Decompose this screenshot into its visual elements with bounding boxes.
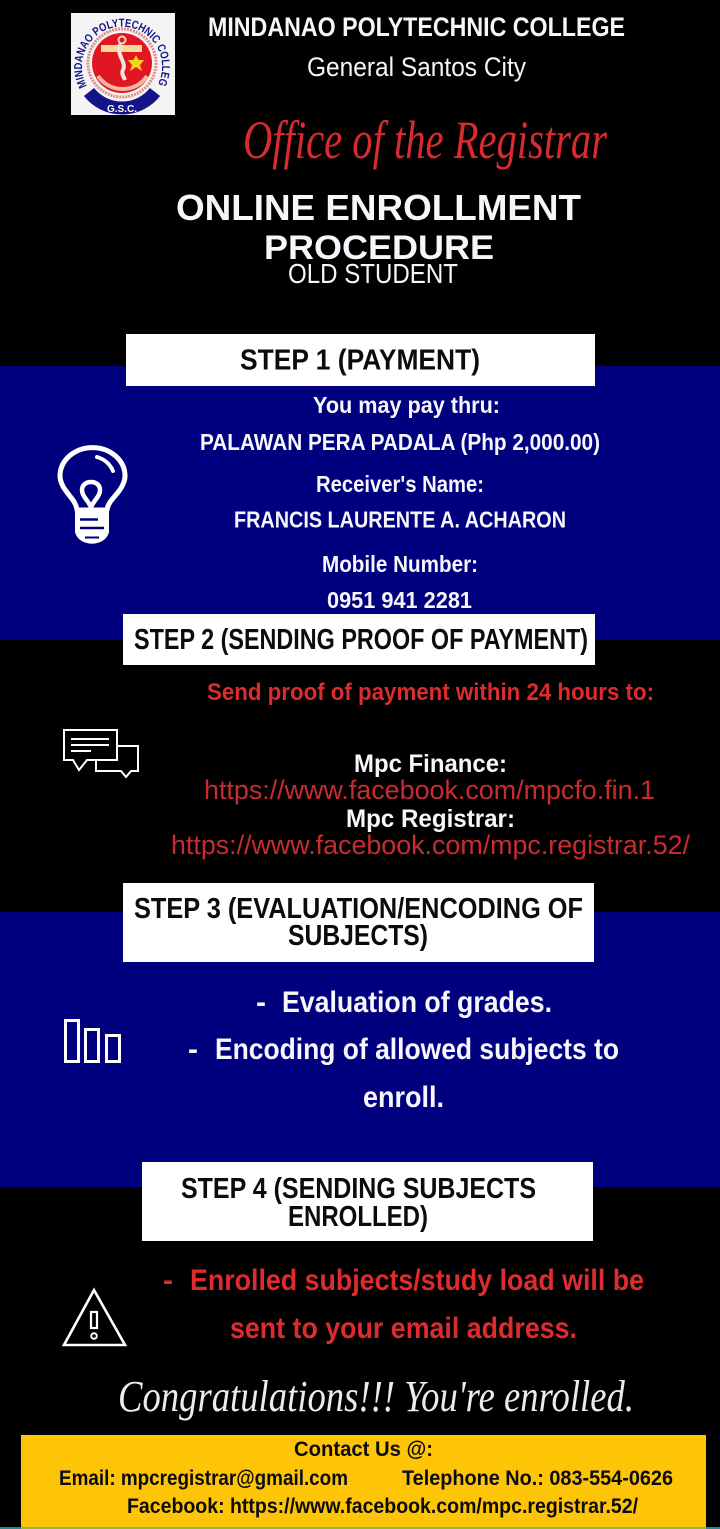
- text block: facebook contacts: [171, 750, 690, 860]
- subtitle: old student: OLD STUDENT: [288, 258, 458, 289]
- text block: facebook contacts: https://www.facebook.com/mpcfo.fin.1: [204, 775, 655, 805]
- step 4 header: STEP 4 (SENDING SUBJECTS: [181, 1173, 536, 1205]
- subtitle: city: General Santos City: [307, 52, 526, 82]
- text block: payment details: 0951 941 2281: [327, 587, 472, 613]
- text block: payment details: FRANCIS LAURENTE A. ACHARON: [234, 506, 566, 532]
- icon: light bulb: [60, 448, 125, 542]
- text block: evaluation list: -: [188, 1033, 198, 1066]
- panel: step 3 blue band: [0, 912, 720, 1187]
- text block: evaluation list: -: [256, 986, 266, 1019]
- panel: contact details: Email: mpcregistrar@gmail.com: [59, 1467, 348, 1490]
- heading: office of the registrar: Office of the Registrar: [243, 110, 608, 170]
- step 2 header: STEP 2 (SENDING PROOF OF PAYMENT): [134, 624, 588, 656]
- title: online enrollment: ONLINE ENROLLMENT: [176, 187, 581, 228]
- step 1 header: STEP 1 (PAYMENT): [240, 344, 480, 376]
- text block: evaluation list: [188, 986, 619, 1114]
- text block: payment details: [200, 392, 600, 613]
- text block: evaluation list: Evaluation of grades.: [282, 986, 552, 1019]
- step 4 header: [142, 1162, 593, 1241]
- icon: bar chart: [66, 1020, 120, 1062]
- text block: send proof instruction: Send proof of payment within 24 hours to:: [207, 679, 654, 706]
- text block: facebook contacts: Mpc Registrar:: [346, 805, 515, 833]
- text block: payment details: Mobile Number:: [322, 551, 478, 577]
- step 2 header: [123, 614, 595, 665]
- panel: step 1 blue band: [0, 366, 720, 640]
- panel: contact details: [0, 1435, 720, 1529]
- icon: warning triangle: [64, 1290, 125, 1345]
- step 4 header: ENROLLED): [288, 1201, 428, 1233]
- closing message: Congratulations!!! You're enrolled.: [118, 1372, 634, 1421]
- text block: enrolled subjects notice: sent to your email address.: [230, 1312, 577, 1345]
- text block: enrolled subjects notice: Enrolled subjects/study load will be: [190, 1264, 644, 1297]
- text block: enrolled subjects notice: -: [163, 1264, 173, 1297]
- step 3 header: STEP 3 (EVALUATION/ENCODING OF: [134, 893, 583, 925]
- text block: facebook contacts: https://www.facebook.com/mpc.registrar.52/: [171, 830, 690, 860]
- step 1 header: [126, 334, 595, 386]
- text block: enrolled subjects notice: [163, 1264, 644, 1345]
- logo: Mindanao Polytechnic College seal: [71, 13, 175, 115]
- icon: chat bubbles: [64, 730, 138, 777]
- text block: payment details: You may pay thru:: [313, 392, 500, 418]
- logo: Mindanao Polytechnic College seal: G.S.C.: [107, 104, 137, 115]
- text block: facebook contacts: Mpc Finance:: [354, 750, 507, 778]
- step 3 header: SUBJECTS): [288, 920, 428, 952]
- text block: evaluation list: Encoding of allowed subjects to: [215, 1033, 619, 1066]
- title: procedure: PROCEDURE: [264, 229, 494, 267]
- step 3 header: [123, 883, 594, 962]
- text block: evaluation list: enroll.: [363, 1081, 444, 1114]
- text block: payment details: PALAWAN PERA PADALA (Php 2,000.00): [200, 429, 600, 455]
- panel: contact details: Facebook: https://www.facebook.com/mpc.registrar.52/: [127, 1495, 638, 1518]
- panel: contact details: Contact Us @:: [294, 1438, 433, 1461]
- panel: contact details: Telephone No.: 083-554-0626: [402, 1467, 673, 1490]
- title: college name: MINDANAO POLYTECHNIC COLLEGE: [208, 12, 625, 42]
- text block: payment details: Receiver's Name:: [316, 471, 484, 497]
